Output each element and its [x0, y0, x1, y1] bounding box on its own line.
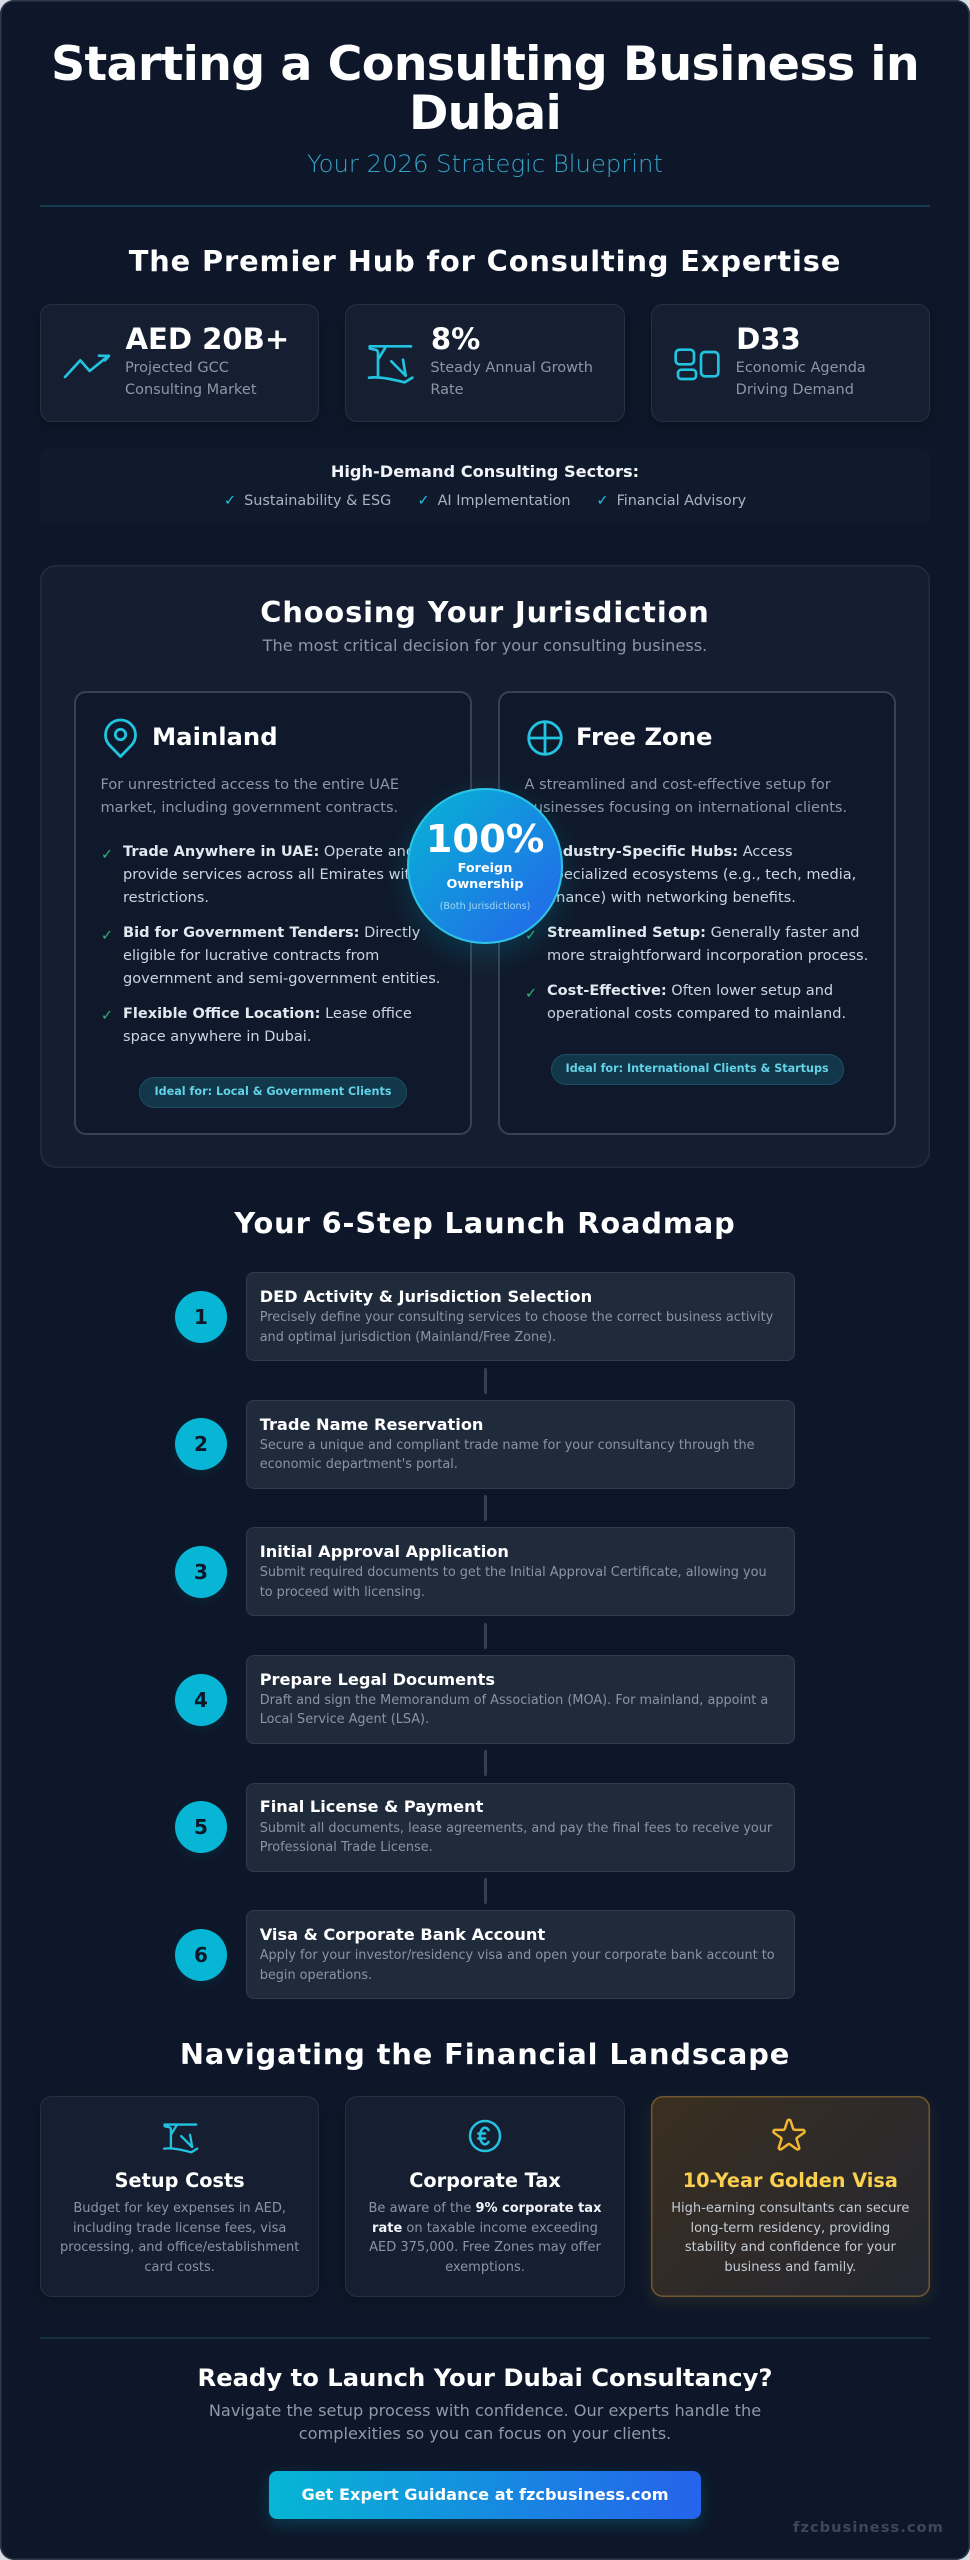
step card: Precisely define your consulting services to choose the correct business activity [260, 1310, 773, 1325]
check: ✓ [525, 928, 537, 944]
check: ✓ [525, 986, 537, 1002]
title: Starting a Consulting Business in [51, 37, 919, 92]
step card: Professional Trade License. [260, 1840, 433, 1855]
card text: High-earning consultants can secure [671, 2201, 909, 2216]
benefit: streamlined setup: more straightforward incorporation process. [547, 947, 868, 964]
step 2 [175, 1400, 795, 1489]
badge: 100% foreign ownership [407, 788, 563, 944]
benefit: streamlined setup: Streamlined Setup: Generally faster and [547, 924, 859, 941]
connector [484, 1495, 486, 1521]
card text: Be aware of the 9% corporate tax [369, 2201, 601, 2216]
stat value: AED 20B+ [126, 322, 289, 356]
step 1 [175, 1272, 795, 1361]
connector [484, 1368, 486, 1394]
call to action text: complexities so you can focus on your clients. [299, 2424, 671, 2443]
benefit: trade anywhere: provide services across all Emirates with no [123, 866, 442, 883]
step card: to proceed with licensing. [260, 1585, 425, 1600]
call to action button [269, 2471, 701, 2519]
badge label: Foreign [458, 861, 512, 876]
step number: 2 [194, 1432, 208, 1456]
card text: exemptions. [445, 2260, 525, 2275]
card text: stability and confidence for your [685, 2240, 896, 2255]
step 3 [175, 1527, 795, 1616]
step card [246, 1400, 795, 1489]
badge value: 100% [426, 817, 544, 862]
call to action text [209, 2401, 761, 2443]
mainland description [100, 776, 399, 816]
badge label: Ownership [446, 877, 524, 892]
step card [246, 1527, 795, 1616]
call to action text: Navigate the setup process with confidence. Our experts handle the [209, 2401, 761, 2420]
sector: financial: ✓ Financial Advisory [596, 493, 746, 509]
step card: Initial Approval Application [260, 1542, 509, 1561]
benefit: trade anywhere: restrictions. [123, 889, 209, 906]
heading: financial landscape: Navigating the Financial Landscape [180, 2037, 790, 2071]
icon: star [772, 2118, 806, 2151]
card: golden visa [651, 2096, 930, 2297]
card text: AED 375,000. Free Zones may offer [369, 2240, 601, 2255]
step number [175, 1929, 227, 1981]
step number [175, 1291, 227, 1343]
benefit: government tenders: eligible for lucrative contracts from [123, 947, 379, 964]
step card: economic department's portal. [260, 1457, 458, 1472]
benefit: government tenders: government and semi-government entities. [123, 970, 440, 987]
card text [60, 2201, 300, 2275]
step card: Visa & Corporate Bank Account [260, 1925, 545, 1944]
pill: ideal for free zone [551, 1054, 844, 1085]
step number: 6 [194, 1943, 208, 1967]
title: Dubai [409, 86, 561, 140]
benefit: government tenders: Bid for Government Tenders: Directly [123, 924, 420, 941]
stat label: Steady Annual Growth [430, 360, 593, 376]
sector: sustainability: ✓ Sustainability & ESG [224, 493, 391, 509]
step number: 1 [194, 1305, 208, 1329]
benefit: industry hubs: specialized ecosystems (e.g., tech, media, [547, 866, 856, 883]
pill: ideal for mainland [139, 1077, 407, 1108]
card text: processing, and office/establishment [60, 2240, 299, 2255]
benefit: cost effective: operational costs compared to mainland. [547, 1005, 846, 1022]
benefit: government tenders [123, 924, 440, 987]
card text: business and family. [724, 2260, 856, 2275]
step card: Local Service Agent (LSA). [260, 1712, 429, 1727]
step card [246, 1783, 795, 1872]
card: free zone [498, 691, 896, 1135]
step card: Prepare Legal Documents [260, 1670, 495, 1689]
benefit: industry hubs: Industry-Specific Hubs: Access [547, 843, 793, 860]
step card: Final License & Payment [260, 1797, 483, 1816]
stat label: Projected GCC [125, 360, 229, 376]
call to action button: Get Expert Guidance at fzcbusiness.com [301, 2485, 669, 2504]
free zone description [524, 776, 847, 816]
check: ✓ [101, 928, 113, 944]
stat label [125, 360, 257, 398]
heading: roadmap: Your 6-Step Launch Roadmap [234, 1206, 736, 1240]
step 4 [175, 1655, 795, 1744]
card: mainland [74, 691, 472, 1135]
sector: AI: ✓ AI Implementation [418, 493, 570, 509]
step number: 5 [194, 1815, 208, 1839]
icon: euro coin [468, 2120, 502, 2152]
card text: rate on taxable income exceeding [372, 2221, 598, 2236]
sectors heading: High-Demand Consulting Sectors: [331, 462, 639, 481]
stat label: Driving Demand [736, 382, 854, 398]
icon: globe cross [527, 720, 563, 756]
benefit: streamlined setup [547, 924, 868, 964]
step card: Draft and sign the Memorandum of Association (MOA). For mainland, appoint a [260, 1693, 768, 1708]
roadmap steps [175, 1272, 795, 1999]
stat label [736, 360, 866, 398]
free zone heading: Free Zone [576, 722, 713, 751]
connector [484, 1750, 486, 1776]
benefit: industry hubs [547, 843, 856, 906]
step 6 [175, 1910, 795, 1999]
step number [175, 1674, 227, 1726]
mainland description: For unrestricted access to the entire UAE [100, 776, 399, 793]
free zone description: A streamlined and cost-effective setup for [524, 776, 831, 793]
card text: Budget for key expenses in AED, [73, 2201, 286, 2216]
step card: and optimal jurisdiction (Mainland/Free Zone). [260, 1330, 556, 1345]
stat card: market size [40, 304, 319, 422]
card text [369, 2201, 602, 2275]
subtitle: Your 2026 Strategic Blueprint [307, 149, 663, 178]
card text: including trade license fees, visa [73, 2221, 286, 2236]
panel: high-demand sectors [40, 448, 930, 524]
step card: Secure a unique and compliant trade name for your consultancy through the [260, 1438, 755, 1453]
mainland heading: Mainland [152, 722, 278, 751]
icon: map pin [104, 718, 137, 758]
step number: 3 [194, 1560, 208, 1584]
free zone description: businesses focusing on international clients. [524, 799, 847, 816]
connector [484, 1623, 486, 1649]
card heading: 10-Year Golden Visa [683, 2169, 898, 2192]
card heading: Corporate Tax [409, 2169, 561, 2192]
step card: Trade Name Reservation [260, 1415, 483, 1434]
title [51, 37, 919, 140]
step number: 4 [194, 1688, 208, 1712]
benefit: cost effective: Cost-Effective: Often lower setup and [547, 982, 833, 999]
connector [484, 1878, 486, 1904]
step number [175, 1546, 227, 1598]
card text [671, 2201, 909, 2275]
benefit: flexible office: space anywhere in Dubai. [123, 1028, 311, 1045]
step card: Submit required documents to get the Initial Approval Certificate, allowing you [260, 1565, 767, 1580]
benefit: flexible office: Flexible Office Location: Lease office [123, 1005, 412, 1022]
stat card: D33 [651, 304, 930, 422]
pill: ideal for mainland: Ideal for: Local & Government Clients [154, 1085, 391, 1098]
step card [246, 1910, 795, 1999]
icon: cost glyph [162, 2123, 198, 2154]
call to action heading: Ready to Launch Your Dubai Consultancy? [198, 2363, 772, 2392]
stat value: 8% [431, 322, 480, 356]
icon: dashboard blocks [674, 348, 720, 380]
stat label [430, 360, 593, 398]
step number [175, 1801, 227, 1853]
card text: long-term residency, providing [690, 2221, 890, 2236]
step card: begin operations. [260, 1968, 372, 1983]
step number [175, 1418, 227, 1470]
panel: choosing your jurisdiction [40, 565, 930, 1168]
benefit: industry hubs: finance) with networking benefits. [547, 889, 796, 906]
stat card: growth rate [345, 304, 625, 422]
heading: premier hub: The Premier Hub for Consulting Expertise [129, 244, 841, 278]
badge note: (Both Jurisdictions) [440, 901, 530, 912]
card text: card costs. [144, 2260, 215, 2275]
check: ✓ [101, 1008, 113, 1024]
badge label [446, 861, 524, 892]
check: ✓ [101, 846, 113, 862]
watermark: fzcbusiness.com [793, 2519, 944, 2536]
benefit: flexible office [123, 1005, 412, 1045]
card heading: Setup Costs [115, 2169, 245, 2192]
step 5 [175, 1783, 795, 1872]
benefit: trade anywhere [123, 843, 442, 906]
icon: trending chart [64, 354, 110, 378]
card: corporate tax [345, 2096, 625, 2297]
check: ✓ [525, 846, 537, 862]
stat label: Economic Agenda [736, 360, 866, 376]
mainland description: market, including government contracts. [100, 799, 398, 816]
stat label: Consulting Market [125, 382, 257, 398]
icon: growth glyph [368, 345, 414, 384]
pill: ideal for free zone: Ideal for: International Clients & Startups [566, 1062, 829, 1075]
step card [246, 1655, 795, 1744]
step card: Apply for your investor/residency visa and open your corporate bank account to [260, 1948, 775, 1963]
jurisdiction subtitle: The most critical decision for your consulting business. [263, 636, 707, 655]
heading: jurisdiction: Choosing Your Jurisdiction [260, 595, 710, 629]
stat label: Rate [430, 382, 464, 398]
step card: DED Activity & Jurisdiction Selection [260, 1287, 592, 1306]
step card: Submit all documents, lease agreements, and pay the final fees to receive your [260, 1821, 772, 1836]
stat value: D33 [736, 322, 801, 356]
benefit: cost effective [547, 982, 846, 1022]
benefit: trade anywhere: Trade Anywhere in UAE: Operate and [123, 843, 415, 860]
card: setup costs [40, 2096, 319, 2297]
step card [246, 1272, 795, 1361]
